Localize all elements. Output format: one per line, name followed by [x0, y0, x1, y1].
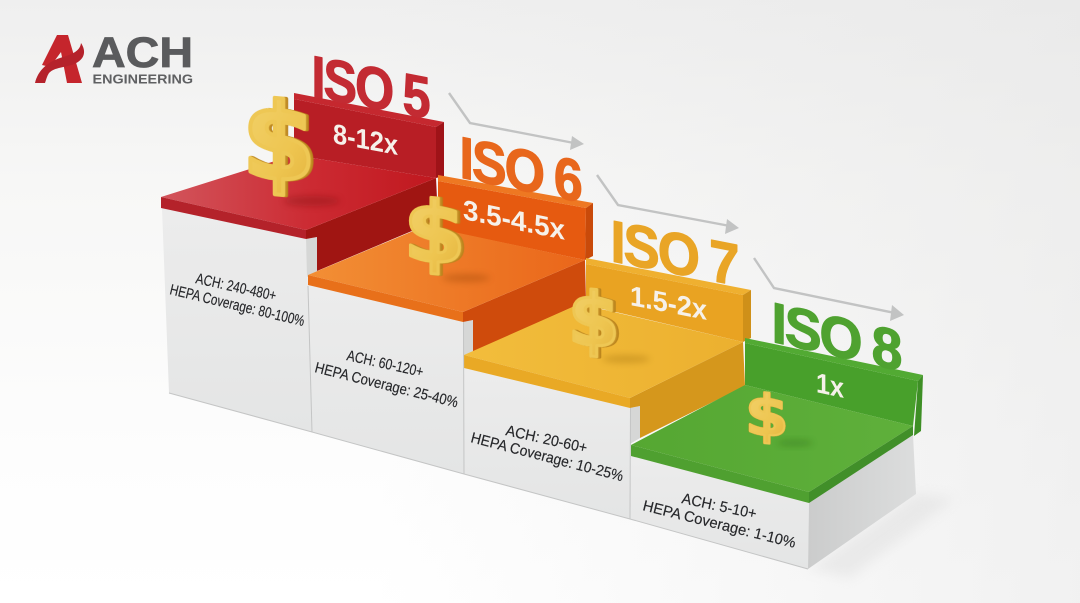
icon: small dollar sign — [745, 382, 813, 451]
front lip — [631, 445, 809, 503]
ACH caption: ACH: 60-120+ — [345, 347, 425, 381]
heading: ISO 6: ISO 6 — [460, 124, 582, 215]
back wall — [294, 93, 444, 178]
icon: large dollar sign: $ — [242, 78, 316, 208]
HEPA caption: HEPA Coverage: 80-100% — [168, 281, 306, 330]
floor — [161, 155, 436, 230]
tier: ISO 6 orange — [308, 124, 593, 474]
side face — [463, 260, 586, 352]
logo wordmark: ACH — [92, 29, 193, 77]
white column with label — [162, 208, 317, 432]
white block with label — [630, 435, 916, 569]
icon: small dollar sign: $ — [745, 382, 789, 451]
HEPA caption: HEPA Coverage: 25-40% — [313, 359, 460, 411]
icon: medium dollar sign: $ — [404, 182, 465, 285]
arrow: ISO 6 to ISO 7 — [597, 175, 739, 234]
heading: ISO 5: ISO 5 — [312, 43, 430, 132]
logo: ACH Engineering — [35, 29, 193, 86]
tier: ISO 5 red — [161, 43, 444, 432]
front lip — [161, 197, 306, 239]
arrow: ISO 7 to ISO 8 — [754, 258, 904, 321]
HEPA caption: HEPA Coverage: 1-10% — [641, 497, 797, 552]
ACH caption: ACH: 20-60+ — [504, 422, 589, 457]
multiplier: 3.5-4.5x: 3.5-4.5x — [463, 193, 565, 246]
multiplier: 1x: 1x — [816, 366, 844, 404]
ACH caption: ACH: 5-10+ — [680, 490, 758, 523]
floor — [308, 221, 585, 312]
front lip — [464, 355, 630, 408]
floor — [464, 301, 743, 398]
back wall — [745, 338, 923, 436]
ACH caption: ACH: 240-480+ — [194, 270, 278, 305]
front lip — [308, 275, 463, 322]
tier: ISO 7 yellow — [464, 208, 751, 519]
side face — [306, 178, 438, 271]
multiplier: 8-12x: 8-12x — [333, 117, 398, 161]
arrow: ISO 5 to ISO 6 — [449, 93, 584, 150]
HEPA caption: HEPA Coverage: 10-25% — [469, 429, 625, 485]
icon: red A with swoosh — [35, 35, 84, 83]
heading: ISO 8: ISO 8 — [772, 291, 901, 384]
back wall — [586, 258, 751, 342]
right lip — [809, 426, 913, 503]
icon: small-medium dollar sign — [568, 276, 650, 366]
side face — [630, 342, 745, 438]
floor — [631, 385, 913, 492]
multiplier: 1.5-2x: 1.5-2x — [630, 279, 707, 326]
logo subtitle: ENGINEERING — [92, 72, 193, 86]
tier: ISO 8 green — [630, 291, 923, 569]
heading: ISO 7: ISO 7 — [610, 208, 738, 299]
white column with label — [464, 368, 640, 519]
column base edges — [169, 286, 808, 569]
back wall — [438, 175, 593, 260]
icon: small-medium dollar sign: $ — [568, 276, 619, 366]
white column with label — [308, 285, 473, 474]
ground shadow — [808, 494, 955, 578]
